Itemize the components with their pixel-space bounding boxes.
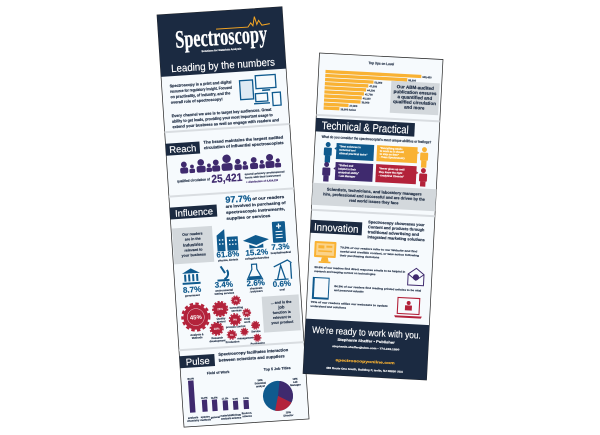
- bar chart: field of work: 13.5%: [211, 396, 219, 400]
- stat text: print: 84.3% of our readers find reading printed articles to be vital: [334, 284, 422, 293]
- bar chart: field of work: science: [232, 415, 242, 420]
- stat text: email: [314, 265, 406, 278]
- gear labels: Field: [244, 317, 251, 321]
- panel: orange quote: to work as it should: [380, 149, 404, 154]
- stat: contract labs: testing services: [214, 291, 235, 296]
- callout: job function: [262, 294, 301, 333]
- panel: gray statement: [312, 183, 436, 211]
- pie chart: top job titles: 15%: [286, 410, 292, 414]
- bar chart: field of work: Field of Work: [207, 370, 230, 376]
- innovation text: traditional advertising and: [368, 229, 420, 237]
- pie chart: top job titles: Director: [283, 413, 294, 418]
- innovation text: Spectroscopy showcases your: [368, 219, 425, 227]
- icon: graduation cap: [243, 234, 269, 249]
- intro text block: on practicality, of industry, and the: [170, 90, 231, 99]
- intro text block: extend your business as well as engage with readers and: [172, 117, 280, 129]
- tagline: Solutions for Materials Analysis: [201, 47, 242, 53]
- stat: chemicals: [246, 278, 265, 294]
- callout: industries: Our readers: [182, 231, 203, 237]
- panel: gray statement: Scientists, technicians, and laboratory managers: [327, 187, 423, 197]
- gear labels: Quality: [216, 316, 226, 321]
- bar chart: field of work: 14.0%: [201, 396, 209, 400]
- panel: gray statement: hire, professional and successful and are driven by the: [323, 191, 426, 202]
- icon: buildings: [216, 228, 239, 252]
- callout: job function: job: [277, 304, 285, 310]
- footer heading: We're ready to work with you.: [312, 325, 421, 342]
- callout: industries: your business: [181, 252, 206, 258]
- bar chart: top ups: [323, 59, 433, 116]
- panel: purple quote: helpful in their: [338, 167, 356, 172]
- icon: blue book: [312, 277, 330, 300]
- gear values: 26%: [217, 307, 224, 311]
- panel: crimson quote: [375, 164, 419, 184]
- bar chart: field of work: chemistry: [187, 418, 200, 423]
- gear labels: Purchasing: [250, 341, 265, 346]
- panel: orange quote: to stay on time": [380, 152, 400, 157]
- innovation text: [367, 219, 426, 242]
- panel: innovation: [306, 216, 427, 319]
- intro text block: Spectroscopy is a print and digital: [169, 79, 232, 88]
- contact lines: Stephanie Shaffer • Publisher: [337, 338, 396, 345]
- stat text: webinar: understand and solutions: [310, 304, 347, 310]
- icon: red laptop: [394, 297, 423, 319]
- callout: ABM audited: Our ABM-audited: [397, 84, 434, 91]
- influence stat: of our readers: [252, 194, 285, 201]
- icon: purple person: [322, 162, 331, 182]
- panel: blue quote: technical and: [339, 148, 356, 153]
- panel: crimson quote: - Analytical Chemist": [378, 173, 405, 179]
- stat: government: 8.7%: [183, 285, 201, 295]
- stat: hospital: 7.3%: [271, 242, 290, 252]
- logo wordmark: Spectroscopy: [174, 21, 268, 54]
- panel: reach: circulation of influential spectroscopists: [204, 140, 285, 150]
- bar chart: top ups: 41,700: [365, 92, 373, 97]
- bar chart: top ups: 47,500: [369, 84, 378, 89]
- panel: orange quote: [376, 145, 420, 163]
- stat: contract labs: [214, 280, 235, 296]
- influence stat: [225, 191, 287, 221]
- bar chart: field of work: analysis: [188, 415, 199, 420]
- icon: oil pump: [273, 260, 293, 280]
- stat: chemicals: / polymers: [250, 289, 263, 294]
- callout: ABM audited: qualified circulation: [393, 99, 436, 106]
- icon: crimson person: [419, 168, 427, 187]
- bar chart: field of work: 45.0%: [187, 377, 195, 381]
- orange spectrum line: [215, 16, 270, 29]
- icon: blue person: [323, 142, 332, 163]
- intro text block: ability to get leads, providing your most important usage to: [172, 112, 273, 124]
- pie chart: top job titles: 34%: [257, 378, 264, 382]
- callout: ABM audited: [390, 81, 440, 115]
- pie chart: top job titles: Manager: [290, 382, 301, 387]
- stat: pharma: pharma, biotech: [218, 257, 239, 263]
- stat text: website: [340, 245, 420, 261]
- bar chart: field of work: spectro: [201, 414, 211, 419]
- bar chart: top ups: 52,000: [374, 80, 383, 85]
- pulse heading: Pulse: [185, 356, 210, 368]
- bar chart: top ups: 27,300: [349, 104, 358, 108]
- innovation text: Content and products through: [368, 224, 425, 232]
- stat: hospital: hospital/medical: [271, 250, 291, 255]
- icon: flask: [247, 264, 262, 280]
- panel: orange quote: - Team Spectrometry: [379, 155, 405, 160]
- pulse text: Spectroscopy facilitates interaction: [218, 347, 289, 357]
- reach number: 25,421: [211, 172, 243, 186]
- panel: header: [157, 7, 286, 77]
- stat: academia: college/universities: [245, 255, 270, 261]
- stat: oil: 0.6%: [272, 279, 291, 289]
- callout: industries: Industries: [183, 241, 204, 248]
- website link: spectroscopyonline.com: [335, 358, 395, 365]
- contact lines: [332, 337, 400, 352]
- icon: devices: [239, 74, 281, 108]
- panel: crimson quote: "Never gives up until: [379, 166, 405, 172]
- reach number: [177, 169, 285, 189]
- bar chart: top ups: 39,000: [361, 100, 370, 105]
- panel: gray statement: real world issues they face: [349, 198, 399, 205]
- panel: footer: [303, 319, 429, 380]
- footer address: 485 Route One South, Building F, Iselin, NJ 08830 USA: [326, 366, 403, 374]
- pie chart: top job titles: 19%: [292, 377, 298, 381]
- gear labels: work: [244, 320, 251, 324]
- callout: job function: relevant to: [273, 315, 292, 320]
- stat text: website: 79.5% of our readers refer to our Website and find: [340, 245, 418, 253]
- gear: largest 45%: 45%: [190, 315, 203, 322]
- bar chart: top ups: 44,200: [367, 88, 376, 93]
- question text: What do you consider the spectroscopist's most unique abilities or feelings?: [322, 135, 431, 144]
- bar chart: field of work: analysis: [221, 416, 232, 421]
- gear values: [212, 299, 250, 338]
- gear labels: control: [217, 319, 226, 324]
- panel: right page: [303, 53, 443, 380]
- panel: pulse: [179, 346, 303, 424]
- icon: orange monitor: [314, 241, 337, 264]
- stat: contract labs: 3.4%: [214, 280, 233, 290]
- callout: ABM audited: a quantified and: [397, 94, 433, 101]
- bar chart: top ups: 40,100: [363, 96, 371, 101]
- callout: job function: ... and is the: [271, 300, 292, 305]
- bar chart: top ups: Top Ups on Level: [368, 61, 394, 66]
- stat text: website: useful and credible content, or take action following: [340, 249, 420, 257]
- icon: hospital: [272, 221, 286, 243]
- gear labels: [189, 304, 265, 349]
- icon: microscope: [217, 266, 229, 281]
- bar chart: field of work: science: [242, 414, 253, 418]
- stat text: email: research and keeping current on technologies: [314, 269, 376, 276]
- gear labels: Methods: [192, 335, 203, 340]
- intro text block: resource for regulatory insight. Focused: [170, 85, 232, 94]
- intro text block: [169, 76, 280, 129]
- stat: government: government: [185, 293, 200, 298]
- stat: hospital: [270, 242, 291, 255]
- gear labels: Consulting: [229, 305, 244, 310]
- bar chart: top ups: 18,900 Anion: [340, 107, 357, 112]
- panel: blue quote: clinical practical tasks": [339, 151, 368, 157]
- heading: Leading by the numbers: [171, 56, 275, 75]
- panel: blue quote: "Best sciences in: [339, 144, 361, 149]
- pie chart: top job titles: [254, 365, 303, 419]
- influence stat: are involved in purchasing of: [226, 200, 286, 209]
- icon: bank: [182, 268, 201, 285]
- stat text: print: and preserved valuable: [334, 288, 364, 294]
- icon: audience people: [179, 151, 281, 174]
- technical heading: Technical & Practical: [321, 120, 409, 137]
- callout: industries: are in the: [185, 237, 201, 242]
- influence stat: 97.7%: [225, 193, 252, 205]
- gear values: 9%: [233, 317, 238, 322]
- panel: influence: [169, 191, 302, 350]
- panel: purple quote: - Lab Manager: [338, 174, 355, 179]
- gear labels: Analysis &: [190, 332, 204, 337]
- intro text block: overall role of spectroscopy!: [171, 96, 223, 105]
- bar chart: top ups: 88,900: [408, 78, 417, 83]
- gear values: 6%: [230, 334, 234, 337]
- callout: industries: relevant to: [184, 247, 203, 253]
- gear values: 18%: [214, 327, 220, 331]
- pie chart: top job titles: analyst: [256, 384, 265, 388]
- pie chart: top job titles: Lab: [293, 380, 298, 384]
- panel: reach: [165, 134, 287, 189]
- bar chart: field of work: general: [211, 415, 220, 419]
- panel: purple quote: [333, 162, 373, 182]
- bar chart: field of work: [184, 369, 253, 423]
- reach number: hours with their instrument: [245, 173, 281, 180]
- gear labels: management: [237, 335, 254, 340]
- stat: academia: 15.2%: [245, 247, 268, 258]
- bar chart: field of work: 9.0%: [232, 397, 239, 401]
- reach heading: Reach: [169, 143, 197, 156]
- contact lines: stephanie.shaffer@ubm.com • 774.249.1890: [332, 344, 400, 352]
- bar chart: field of work: 11.2%: [222, 397, 229, 401]
- panel: purple quote: analytical ability": [338, 170, 360, 175]
- gear chart: [181, 294, 261, 346]
- bar chart: field of work: 8.5%: [243, 397, 250, 400]
- gear labels: Research: [211, 335, 224, 340]
- callout: industries: [172, 226, 214, 264]
- panel: left page: [157, 7, 309, 427]
- icon: purple envelope: [408, 268, 424, 286]
- icon: orange person: [420, 147, 429, 168]
- callout: ABM audited: and more: [404, 104, 425, 111]
- gear labels: process control: [226, 324, 246, 329]
- innovation heading: Innovation: [314, 222, 359, 236]
- influence stat: supplies or services: [226, 213, 271, 221]
- callout: job function: your product: [271, 320, 294, 325]
- gear values: 7%: [234, 299, 239, 303]
- stat text: website: their purchasing decisions: [340, 253, 380, 259]
- innovation text: integrated marketing solutions: [367, 234, 426, 242]
- pie chart: top job titles: Scientist/: [254, 381, 266, 385]
- callout: ABM audited: publication ensures: [394, 89, 437, 96]
- callout: job function: function is: [273, 310, 291, 315]
- stat: pharma: 61.8%: [216, 249, 239, 260]
- gear labels: development: [209, 338, 226, 343]
- stat: chemicals: chemicals: [250, 286, 263, 291]
- bar chart: field of work: Environ.: [242, 411, 253, 415]
- intro text block: Every channel we use is to target key audiences. Great: [171, 107, 272, 118]
- panel: crimson quote: they know the right: [379, 170, 402, 175]
- panel: purple quote: "Skilled and: [338, 163, 354, 168]
- bar chart: field of work: methods: [200, 417, 212, 422]
- gear labels: Production: [226, 339, 240, 344]
- reach number: qualified circulation of: [177, 177, 211, 184]
- influence stat: spectroscopic instruments,: [226, 206, 285, 215]
- reach number: + distribution of 4,424,115: [246, 178, 279, 184]
- pie chart: top job titles: Top 5 Job Titles: [264, 366, 291, 372]
- stat text: webinar: 70% of our readers utilize our webcasts to update: [311, 300, 389, 308]
- panel: orange quote: "Everything needs: [380, 146, 403, 151]
- stat: contract labs: environmental: [215, 288, 233, 293]
- reach text: The brand maintains the largest audited: [203, 134, 284, 145]
- panel: blue quote: [334, 143, 374, 161]
- panel: pulse: between scientists and suppliers: [219, 353, 286, 363]
- gear values: 5%: [245, 313, 248, 315]
- bar chart: field of work: materials: [220, 413, 232, 418]
- bar chart: field of work: Biology: [231, 412, 242, 417]
- gear labels: services: [231, 308, 242, 313]
- gear labels: Service: [251, 329, 261, 334]
- stat text: webinar: [310, 300, 389, 312]
- stat text: print: [334, 284, 422, 297]
- reach number: spend primary professional: [244, 169, 285, 176]
- influence heading: Influence: [175, 206, 213, 220]
- stat: chemicals: 2.6%: [246, 278, 265, 288]
- bar chart: top ups: 105,450: [422, 75, 432, 79]
- stat: oil: coal: [279, 287, 285, 292]
- stat text: email: 59.6% of our readers find direct response emails to be helpful in: [314, 265, 406, 274]
